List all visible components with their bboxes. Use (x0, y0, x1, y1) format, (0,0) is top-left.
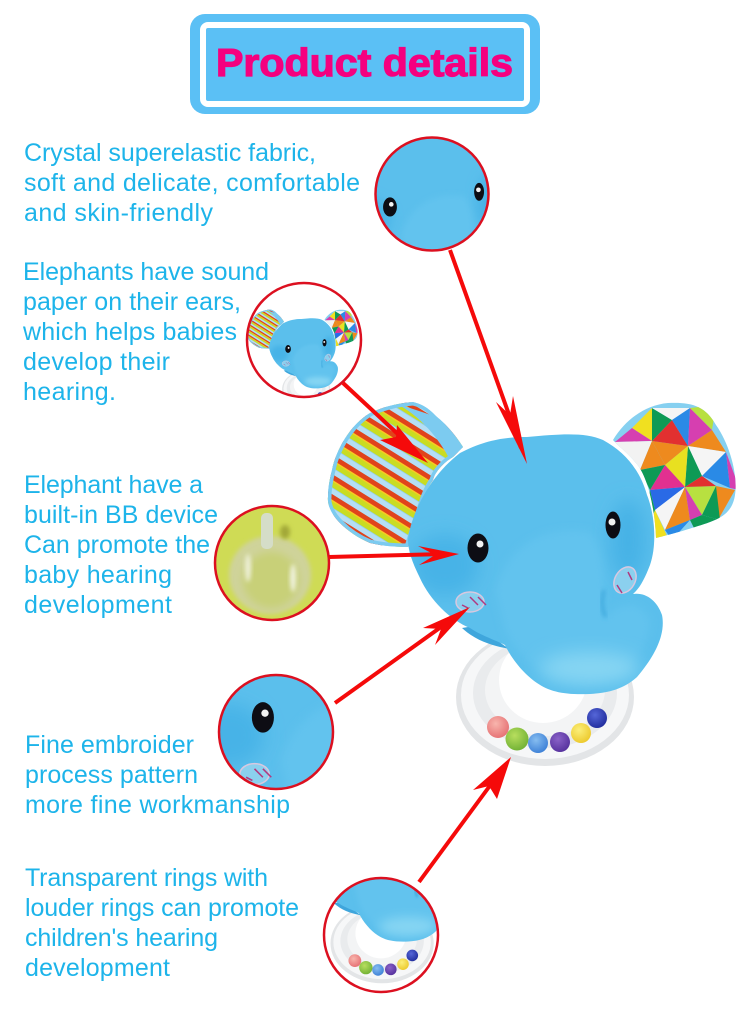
text block: transparent rings: children's hearing (25, 924, 218, 952)
text block: BB device: development (24, 591, 172, 619)
text block: BB device: baby hearing (24, 561, 172, 589)
text block: transparent rings: louder rings can promote (25, 894, 299, 922)
text block: sound paper: Elephants have sound (23, 258, 269, 286)
title badge (190, 14, 540, 114)
text block: BB device: built-in BB device (24, 501, 218, 529)
text block: BB device (24, 471, 218, 619)
text block: transparent rings: development (25, 954, 170, 982)
main product: elephant rattle (252, 343, 740, 766)
text block: transparent rings: Transparent rings with (25, 864, 268, 892)
arrow: fabric to head (450, 250, 527, 464)
text block: fabric: and skin-friendly (24, 199, 214, 227)
detail circle: BB device (215, 506, 329, 620)
text block: sound paper: which helps babies (22, 318, 237, 346)
text block: sound paper: paper on their ears, (23, 288, 241, 316)
text block: embroidery (25, 731, 290, 819)
text block: sound paper: develop their (23, 348, 170, 376)
arrow: ring detail to ring (419, 757, 511, 882)
heading: Product details (216, 42, 513, 85)
arrow: sound paper to ear (343, 383, 428, 463)
text block: embroidery: process pattern (25, 761, 198, 789)
arrow: embroidery to pattern (335, 607, 470, 703)
text block: fabric: soft and delicate, comfortable (24, 169, 360, 197)
text block: fabric: Crystal superelastic fabric, (24, 139, 316, 167)
detail circle: embroidered eye (218, 674, 334, 790)
text block: BB device: Elephant have a (24, 471, 203, 499)
detail circle: transparent ring (322, 876, 440, 994)
detail circle: plush face (374, 136, 490, 252)
text block: sound paper (22, 258, 269, 406)
text block: sound paper: hearing. (23, 378, 116, 406)
detail circle: whole elephant (246, 282, 362, 398)
text block: embroidery: more fine workmanship (25, 791, 290, 819)
arrow: BB device to head (329, 546, 459, 565)
text block: BB device: Can promote the (24, 531, 210, 559)
text block: transparent rings (25, 864, 299, 982)
text block: embroidery: Fine embroider (25, 731, 194, 759)
text block: fabric (24, 139, 360, 227)
